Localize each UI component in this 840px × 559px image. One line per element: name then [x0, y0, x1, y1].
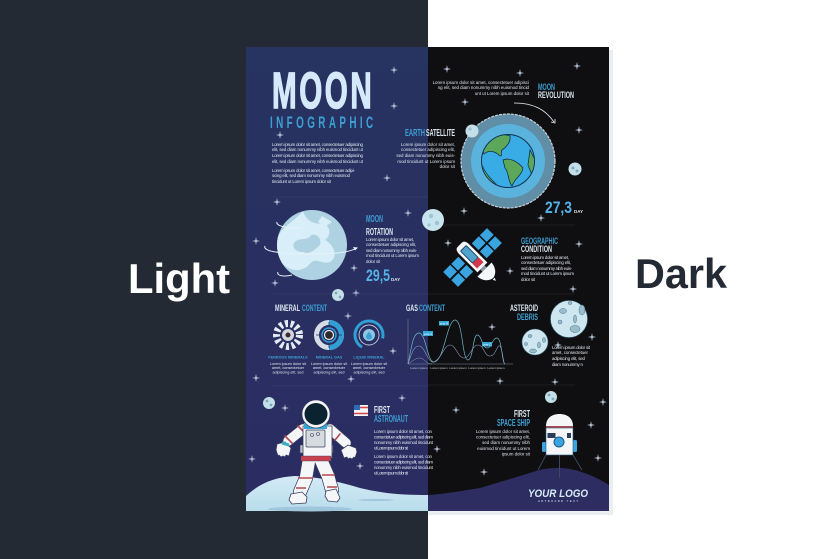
title: MOON — [272, 62, 372, 119]
intro text: Lorem ipsum dolor sit amet, consectetuer adipi- — [272, 168, 356, 173]
illustration: astronaut — [276, 400, 357, 504]
geographic condition text — [521, 255, 574, 282]
geographic condition heading: CONDITION — [521, 244, 552, 254]
chart labels: year C — [483, 342, 492, 346]
mineral captions: adipiscing elit, sed — [353, 370, 385, 374]
mineral captions: FERROUS MINERALS — [268, 356, 308, 360]
panel: light navy side — [246, 47, 428, 511]
earth satellite heading: EARTH — [405, 128, 425, 139]
label: Dark: Dark — [635, 250, 728, 297]
stat: 29,5 day: 29,5 — [366, 266, 390, 285]
first space ship heading — [497, 409, 530, 429]
first space ship text: euismod tincidunt ut Lorem — [477, 446, 530, 451]
earth satellite text: mod tincidunt ut Lorem ipsum — [397, 159, 455, 164]
first space ship text: ipsum dolor sit — [502, 452, 531, 456]
chart labels: Lorem ipsum — [449, 366, 467, 370]
earth diagram — [461, 114, 555, 208]
hill shadows — [268, 499, 394, 512]
moon rotation text: consectetuer adipiscing elit, — [366, 242, 416, 247]
asteroid debris text: amet, consectetuer — [552, 350, 589, 355]
first astronaut text: Lorem ipsum dolor sit amet, con — [374, 454, 433, 459]
earth satellite heading — [405, 128, 455, 139]
icon: ferrous mineral — [276, 324, 300, 346]
geographic condition text: sed diam nonummy nibh euis- — [521, 266, 573, 271]
background: light half — [428, 0, 840, 559]
asteroid debris text: Lorem ipsum dolor sit — [552, 345, 591, 350]
panel: dark side — [428, 47, 609, 511]
moon rotation text — [366, 237, 419, 264]
star field — [248, 62, 607, 476]
moon rotation text: mod tincidunt ut Lorem ipsum — [366, 253, 419, 258]
geographic condition text: mod tincidunt ut Lorem ipsum — [521, 271, 574, 276]
asteroid debris heading: DEBRIS — [517, 312, 538, 323]
mineral captions: amet, consectetuer — [313, 366, 346, 370]
intro text: Lorem ipsum dolor sit amet, consectetuer adipiscing — [272, 153, 364, 158]
stat: 27,3 day: 27,3 — [545, 198, 572, 217]
moon revolution text — [433, 80, 530, 96]
asteroid debris text: diam nonummy n — [552, 362, 584, 367]
asteroid debris text: adipiscing elit, sed — [552, 356, 586, 361]
moon rotation text: sed diam nonummy nibh euis- — [366, 248, 418, 253]
mineral captions: adipiscing elit, sed — [313, 370, 345, 374]
icon: mineral gas — [316, 322, 342, 348]
first space ship text: consectetuer adipiscing elit, — [476, 434, 530, 440]
earth satellite heading: SATELLITE — [426, 128, 455, 139]
intro text: tincidunt ut Lorem ipsum dolor sit — [272, 179, 332, 184]
stat: 27,3 day: DAY — [574, 209, 583, 214]
intro text: elit, sed diam nonummy nibh euismod tincidunt ut — [272, 159, 364, 164]
mineral captions: MINERAL GAS — [316, 356, 343, 360]
illustration: lander — [538, 414, 582, 478]
geographic condition heading — [521, 236, 558, 254]
moon revolution heading: REVOLUTION — [538, 90, 574, 101]
chart labels: Lorem ipsum — [410, 366, 428, 370]
illustration: moon with orbit — [265, 210, 358, 280]
geographic condition text: Lorem ipsum dolor sit amet, — [521, 255, 569, 260]
moon rotation heading: ROTATION — [366, 227, 393, 238]
chart labels: year B — [440, 322, 448, 326]
mineral captions: Lorem ipsum dolor sit — [270, 362, 307, 366]
moon hill left — [246, 476, 428, 511]
first astronaut flag — [354, 405, 368, 416]
arrow: revolution — [514, 103, 555, 123]
first astronaut text: nonummy nibh euismod tincidunt — [374, 465, 434, 470]
first space ship text: Lorem ipsum dolor sit amet, — [476, 429, 530, 434]
geographic condition text: consectetuer adipiscing elit, — [521, 260, 571, 265]
moon revolution heading — [538, 82, 574, 101]
moon rotation text: dolor sit — [366, 259, 381, 264]
earth satellite text — [396, 142, 456, 169]
first astronaut text: Lorem ipsum dolor sit amet, con — [374, 429, 433, 434]
asteroids — [522, 300, 588, 355]
moon revolution heading: MOON — [538, 82, 555, 93]
intro text: elit, sed diam nonummy nibh euismod tincidunt ut — [272, 147, 364, 152]
moon rotation heading: MOON — [366, 214, 383, 225]
intro text: scing elit, sed diam nonummy nibh euismod — [272, 173, 351, 178]
chart labels — [410, 321, 505, 370]
mineral captions — [268, 356, 388, 374]
asteroid debris heading — [510, 303, 538, 323]
moon rotation heading — [366, 214, 393, 238]
first astronaut heading: FIRST — [374, 405, 390, 416]
mineral content heading: MINERAL — [275, 303, 300, 313]
chart labels: Lorem ipsum — [487, 366, 505, 370]
chart labels: year A — [424, 332, 432, 336]
logo: ARTBOARD TEXT — [538, 499, 578, 503]
first astronaut text: ut Lorem ipsum dolor sit — [374, 446, 409, 450]
first astronaut text: consectetuer adipiscing elit, sed diam — [374, 460, 433, 464]
first space ship text: sed diam nonummy nibh — [482, 440, 531, 445]
mineral captions: adipiscing elit, sed — [272, 370, 304, 374]
mineral captions: amet, consectetuer — [272, 366, 305, 370]
moon revolution text: unt ut Lorem ipsum dolor sit — [475, 91, 530, 96]
first astronaut heading — [374, 405, 408, 425]
icon: satellite — [438, 223, 518, 303]
line chart: gas content — [408, 319, 513, 364]
panel shadow — [428, 50, 613, 515]
chart labels: Lorem ipsum — [430, 366, 448, 370]
first astronaut text — [374, 429, 434, 476]
chart labels: Lorem ipsum — [468, 366, 486, 370]
mineral captions: LIQUID MINERAL — [353, 356, 385, 360]
asteroid debris text — [552, 345, 591, 367]
moon revolution text: ng elit, sed diam nonummy nibh euismod tincid — [438, 85, 530, 90]
earth satellite text: sed diam nonummy nibh euis- — [396, 153, 456, 158]
background: dark half — [0, 0, 428, 559]
moon rotation text: Lorem ipsum dolor sit amet, — [366, 237, 414, 242]
label: Light: Light — [128, 255, 230, 302]
mineral captions: amet, consectetuer — [353, 366, 386, 370]
moon revolution text: Lorem ipsum dolor sit amet, consectetuer adipisci — [433, 80, 529, 85]
mineral content heading: CONTENT — [302, 303, 327, 313]
divider lines — [272, 197, 575, 386]
intro text — [272, 142, 364, 184]
first space ship heading: SPACE SHIP — [497, 418, 530, 429]
hill right — [428, 468, 609, 511]
gas content heading: CONTENT — [419, 303, 445, 313]
earth satellite text: dolor sit — [440, 164, 456, 169]
title: INFOGRAPHIC — [270, 113, 373, 132]
icon: liquid mineral — [350, 316, 388, 354]
first space ship heading: FIRST — [514, 409, 530, 420]
logo: YOUR LOGO — [528, 488, 588, 500]
earth satellite text: consectetuer adipiscing elit, — [401, 147, 455, 152]
first space ship text — [476, 429, 531, 456]
mineral captions: Lorem ipsum dolor sit — [351, 362, 388, 366]
small moons — [263, 124, 582, 409]
mineral captions: Lorem ipsum dolor sit — [311, 362, 348, 366]
first astronaut text: consectetuer adipiscing elit, sed diam — [374, 434, 433, 440]
geographic condition text: dolor sit — [521, 277, 536, 282]
earth satellite text: Lorem ipsum dolor sit amet, — [401, 142, 455, 147]
first astronaut text: ut Lorem ipsum dolor sit — [374, 470, 409, 476]
gas content heading: GAS — [406, 303, 418, 313]
intro text: Lorem ipsum dolor sit amet, consectetuer adipiscing — [272, 142, 364, 147]
first astronaut text: nonummy nibh euismod tincidunt — [374, 440, 434, 445]
stat: 29,5 day: DAY — [391, 277, 400, 282]
asteroid debris heading: ASTEROID — [510, 303, 538, 314]
gas content heading — [406, 303, 445, 313]
first astronaut heading: ASTRONAUT — [374, 414, 408, 425]
geographic condition heading: GEOGRAPHIC — [521, 236, 558, 246]
